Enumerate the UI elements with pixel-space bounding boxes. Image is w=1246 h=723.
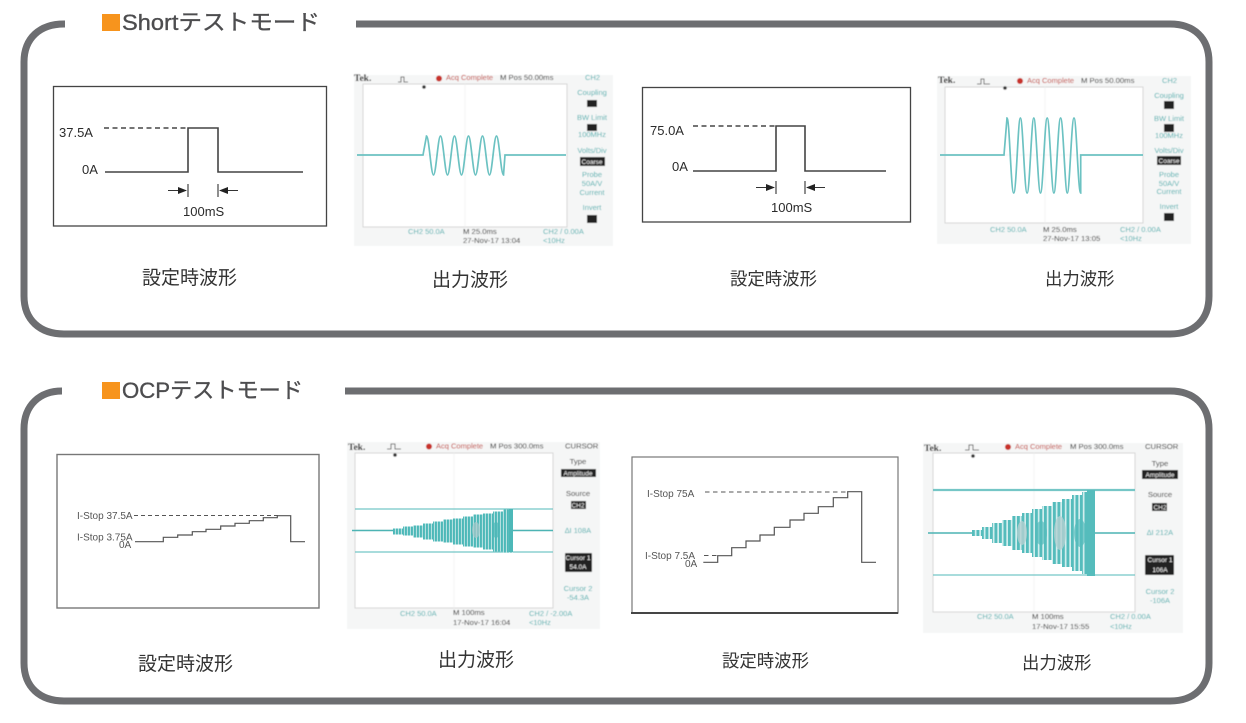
oscilloscope output: I-Stop 37.5A: Source — [566, 489, 590, 498]
oscilloscope output: 37.5A: Coupling — [577, 88, 607, 97]
oscilloscope output: I-Stop 37.5A: CH2 / -2.00A — [529, 609, 572, 618]
oscilloscope output: 75.0A: CH2 50.0A — [990, 225, 1027, 234]
oscilloscope output: 37.5A: M Pos 50.00ms — [500, 73, 554, 82]
oscilloscope output: I-Stop 75A: Tek. — [924, 444, 941, 454]
oscilloscope output: 37.5A: 27-Nov-17 13:04 — [463, 236, 521, 245]
setting waveform: I-Stop 75A: I-Stop 7.5A — [645, 551, 695, 562]
setting waveform: I-Stop 75A — [631, 457, 898, 613]
oscilloscope output: 75.0A: CH2 / 0.00A — [1120, 225, 1161, 234]
oscilloscope output: I-Stop 75A: CH2 — [1153, 504, 1167, 512]
oscilloscope output: 37.5A: CH2 — [585, 73, 600, 82]
oscilloscope output: 75.0A: <10Hz — [1120, 234, 1142, 243]
oscilloscope output: 37.5A: 50A/V — [582, 179, 602, 188]
oscilloscope output: I-Stop 75A: M 100ms — [1032, 612, 1064, 621]
output waveform trace: I-Stop 37.5A — [352, 509, 553, 552]
oscilloscope output: 37.5A — [354, 73, 613, 246]
oscilloscope output: I-Stop 37.5A: ∆I 108A — [565, 526, 591, 535]
caption: 出力波形 — [1045, 269, 1115, 289]
oscilloscope output: 37.5A: CH2 50.0A — [408, 227, 445, 236]
oscilloscope output: I-Stop 75A: CH2 / 0.00A — [1110, 612, 1151, 621]
oscilloscope output: I-Stop 37.5A: Type — [570, 457, 586, 466]
oscilloscope output: I-Stop 75A: Cursor 2 — [1146, 587, 1174, 596]
oscilloscope output: I-Stop 75A: 106A — [1152, 567, 1168, 574]
oscilloscope output: I-Stop 37.5A: -54.3A — [567, 593, 589, 602]
oscilloscope output: I-Stop 37.5A: CURSOR — [565, 442, 599, 450]
oscilloscope output: I-Stop 37.5A — [347, 442, 600, 629]
output waveform trace: 75.0A — [940, 118, 1143, 193]
setting waveform: 37.5A pulse: 0A — [82, 162, 98, 177]
oscilloscope output: 75.0A: Tek. — [938, 76, 955, 86]
oscilloscope output: I-Stop 75A: CURSOR — [1145, 442, 1179, 451]
oscilloscope output: I-Stop 75A: Type — [1152, 459, 1168, 468]
setting waveform: 37.5A pulse: 100mS — [183, 204, 225, 219]
setting waveform: 37.5A pulse: 37.5A — [59, 125, 93, 140]
oscilloscope output: I-Stop 37.5A: Cursor 2 — [564, 584, 592, 593]
oscilloscope output: I-Stop 37.5A: 17-Nov-17 16:04 — [453, 618, 511, 627]
oscilloscope output: 75.0A: Invert — [1160, 202, 1179, 211]
caption: 設定時波形 — [730, 269, 817, 289]
setting waveform: 75.0A pulse: 0A — [672, 159, 688, 174]
oscilloscope output: 37.5A: Tek. — [354, 74, 371, 84]
oscilloscope output: I-Stop 75A: CH2 50.0A — [977, 612, 1014, 621]
oscilloscope output: I-Stop 75A: ∆I 212A — [1147, 528, 1173, 537]
oscilloscope output: I-Stop 75A: Amplitude — [1146, 472, 1175, 479]
oscilloscope output: 75.0A: CH2 — [1162, 76, 1177, 85]
oscilloscope output: 75.0A: Acq Complete — [1027, 76, 1074, 85]
oscilloscope output: I-Stop 75A: Cursor 1 — [1148, 557, 1173, 564]
oscilloscope output: I-Stop 75A: 17-Nov-17 15:55 — [1032, 622, 1089, 631]
oscilloscope output: 37.5A: Volts/Div — [577, 146, 607, 155]
oscilloscope output: 75.0A: 100MHz — [1155, 131, 1183, 140]
oscilloscope output: I-Stop 75A: M Pos 300.0ms — [1070, 442, 1124, 451]
heading: Short: Shortテストモード — [122, 10, 320, 35]
oscilloscope output: 75.0A: Volts/Div — [1154, 146, 1184, 155]
oscilloscope output: I-Stop 37.5A: Tek. — [348, 443, 365, 453]
oscilloscope output: I-Stop 37.5A: <10Hz — [529, 618, 551, 627]
setting waveform: I-Stop 37.5A: I-Stop 3.75A — [77, 532, 133, 544]
oscilloscope output: 37.5A: Acq Complete — [446, 73, 493, 82]
setting waveform: I-Stop 75A: I-Stop 75A — [647, 489, 695, 500]
setting waveform: I-Stop 37.5A: I-Stop 37.5A — [77, 511, 133, 522]
caption: 設定時波形 — [722, 651, 809, 671]
oscilloscope output: 75.0A: M 25.0ms — [1043, 225, 1077, 234]
setting waveform: I-Stop 37.5A: 0A — [119, 540, 132, 551]
oscilloscope output: 37.5A: Current — [579, 188, 605, 197]
oscilloscope output: 37.5A: Invert — [583, 203, 602, 212]
oscilloscope output: 75.0A: Coarse — [1159, 158, 1180, 165]
oscilloscope output: I-Stop 37.5A: Cursor 1 — [566, 555, 591, 562]
oscilloscope output: 75.0A: 27-Nov-17 13:05 — [1043, 234, 1100, 243]
setting waveform: 37.5A pulse — [54, 86, 326, 226]
oscilloscope output: 37.5A: Coarse — [582, 159, 603, 166]
oscilloscope output: 37.5A: M 25.0ms — [463, 227, 497, 236]
oscilloscope output: 75.0A: Probe — [1159, 170, 1179, 179]
oscilloscope output: 75.0A: 50A/V — [1159, 179, 1179, 188]
setting waveform: 75.0A pulse — [642, 88, 910, 222]
oscilloscope output: 75.0A: Coupling — [1154, 91, 1184, 100]
oscilloscope output: I-Stop 37.5A: Acq Complete — [436, 442, 483, 450]
oscilloscope output: I-Stop 37.5A: CH2 50.0A — [400, 609, 437, 618]
oscilloscope output: I-Stop 75A: <10Hz — [1110, 622, 1132, 631]
oscilloscope output: 37.5A: <10Hz — [543, 236, 565, 245]
oscilloscope output: I-Stop 75A: Acq Complete — [1015, 442, 1062, 451]
oscilloscope output: I-Stop 37.5A: M Pos 300.0ms — [490, 442, 544, 450]
oscilloscope output: I-Stop 75A: Source — [1148, 490, 1172, 499]
oscilloscope output: I-Stop 75A: -106A — [1150, 596, 1170, 605]
oscilloscope output: I-Stop 37.5A: Amplitude — [564, 470, 593, 478]
output waveform trace: I-Stop 75A — [928, 490, 1135, 576]
oscilloscope output: 75.0A — [937, 76, 1191, 244]
oscilloscope output: 37.5A: 100MHz — [578, 130, 606, 139]
oscilloscope output: 37.5A: BW Limit — [577, 113, 608, 122]
oscilloscope output: 75.0A: BW Limit — [1154, 114, 1185, 123]
heading: OCP: OCPテストモード — [122, 378, 303, 403]
setting waveform: 75.0A pulse: 100mS — [771, 200, 813, 215]
oscilloscope output: 75.0A: Current — [1156, 187, 1182, 196]
oscilloscope output: 75.0A: M Pos 50.00ms — [1081, 76, 1135, 85]
panel: Short test mode — [24, 10, 1209, 334]
setting waveform: I-Stop 75A: 0A — [685, 559, 698, 570]
caption: 出力波形 — [1022, 653, 1092, 673]
panel frame: OCP — [24, 391, 1209, 701]
setting waveform: 75.0A pulse: 75.0A — [650, 123, 684, 138]
oscilloscope output: I-Stop 37.5A: M 100ms — [453, 608, 485, 617]
setting waveform: I-Stop 37.5A — [57, 454, 319, 608]
output waveform trace: 37.5A — [357, 136, 566, 175]
oscilloscope output: I-Stop 37.5A: CH2 — [571, 502, 585, 510]
panel: OCP test mode — [24, 378, 1209, 701]
oscilloscope output: I-Stop 75A — [923, 442, 1183, 633]
panel frame: Short — [24, 24, 1209, 334]
oscilloscope output: I-Stop 37.5A: 54.0A — [570, 564, 587, 571]
caption: 設定時波形 — [142, 267, 237, 289]
oscilloscope output: 37.5A: CH2 / 0.00A — [543, 227, 584, 236]
caption: 出力波形 — [438, 649, 514, 671]
caption: 設定時波形 — [138, 653, 233, 675]
oscilloscope output: 37.5A: Probe — [582, 170, 602, 179]
caption: 出力波形 — [432, 269, 508, 291]
